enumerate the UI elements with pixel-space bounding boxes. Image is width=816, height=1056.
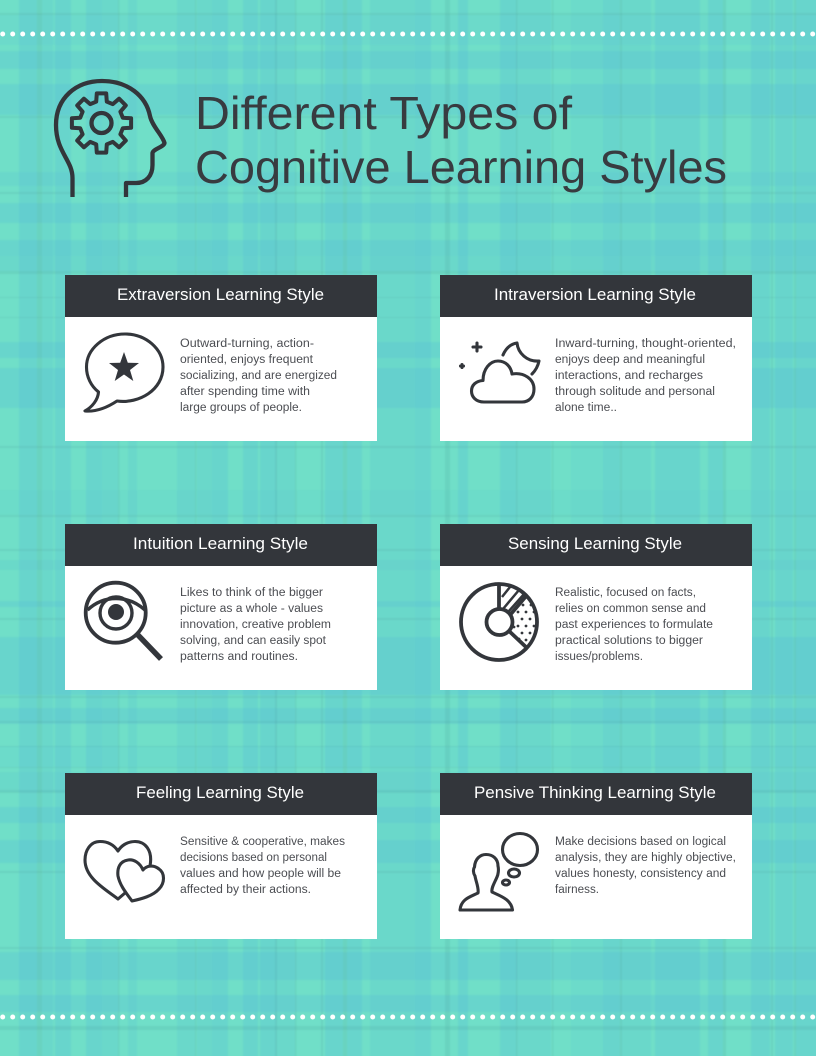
text: intuition description: innovation, creative problem bbox=[180, 619, 331, 631]
text: intraversion description: Inward-turning, thought-oriented, bbox=[555, 338, 736, 350]
text: sensing description bbox=[555, 587, 713, 663]
icon: magnifier over eye bbox=[86, 583, 161, 659]
text: feeling description: Sensitive & cooperative, makes bbox=[180, 836, 345, 848]
text: sensing description: Realistic, focused on facts, bbox=[555, 587, 696, 599]
panel: extraversion bbox=[65, 275, 377, 441]
text: extraversion description: oriented, enjoys frequent bbox=[180, 354, 314, 366]
panel: sensing bbox=[440, 524, 752, 690]
text: sensing description: past experiences to formulate bbox=[555, 619, 713, 631]
text: sensing description: practical solutions to bigger bbox=[555, 635, 703, 647]
text: sensing description: relies on common sense and bbox=[555, 603, 706, 615]
text: feeling description: decisions based on personal bbox=[180, 852, 327, 864]
text: pensive thinking description: fairness. bbox=[555, 884, 599, 896]
panel: feeling bbox=[65, 773, 377, 939]
text: extraversion description: after spending time with bbox=[180, 386, 310, 398]
heading: intraversion: Intraversion Learning Style bbox=[494, 286, 696, 304]
text: intraversion description: alone time.. bbox=[555, 402, 617, 414]
text: feeling description bbox=[180, 836, 345, 896]
dotted border: top bbox=[0, 31, 816, 37]
text: intuition description: Likes to think of the bigger bbox=[180, 587, 323, 599]
panel: intraversion bbox=[440, 275, 752, 441]
dotted border: bottom bbox=[0, 1014, 816, 1020]
text: extraversion description: Outward-turning, action- bbox=[180, 338, 314, 350]
text: extraversion description: socializing, and are energized bbox=[180, 370, 337, 382]
text: sensing description: issues/problems. bbox=[555, 651, 643, 663]
heading: pensive thinking: Pensive Thinking Learning Style bbox=[474, 784, 716, 802]
text: extraversion description: large groups of people. bbox=[180, 402, 302, 414]
title: Cognitive Learning Styles bbox=[195, 141, 727, 193]
icon: cloud, moon and stars bbox=[460, 343, 539, 402]
text: intraversion description: through solitude and personal bbox=[555, 386, 715, 398]
icon: speech bubble with star bbox=[85, 334, 163, 411]
panel: pensive thinking bbox=[440, 773, 752, 939]
title bbox=[195, 87, 727, 193]
text: feeling description: values and how people will be bbox=[180, 868, 341, 880]
heading: intuition: Intuition Learning Style bbox=[133, 535, 308, 553]
text: pensive thinking description bbox=[555, 836, 736, 896]
heading: extraversion: Extraversion Learning Style bbox=[117, 286, 324, 304]
text: feeling description: affected by their actions. bbox=[180, 884, 311, 896]
text: intraversion description: enjoys deep and meaningful bbox=[555, 354, 705, 366]
icon: two hearts bbox=[85, 842, 164, 901]
text: pensive thinking description: analysis, they are highly objective, bbox=[555, 852, 736, 864]
heading: sensing: Sensing Learning Style bbox=[508, 535, 682, 553]
text: intraversion description bbox=[555, 338, 736, 414]
text: intuition description: picture as a whole - values bbox=[180, 603, 323, 615]
icon: person with thought bubbles bbox=[460, 834, 538, 910]
panel: intuition bbox=[65, 524, 377, 690]
text: extraversion description bbox=[180, 338, 337, 414]
heading: feeling: Feeling Learning Style bbox=[136, 784, 304, 802]
icon: head with gear bbox=[56, 81, 164, 197]
text: intuition description: patterns and routines. bbox=[180, 651, 298, 663]
title: Different Types of bbox=[195, 87, 572, 139]
text: pensive thinking description: Make decisions based on logical bbox=[555, 836, 726, 848]
icon: donut chart bbox=[461, 584, 537, 660]
text: pensive thinking description: values honesty, consistency and bbox=[555, 868, 726, 880]
text: intraversion description: interactions, and recharges bbox=[555, 370, 703, 382]
text: intuition description bbox=[180, 587, 331, 663]
text: intuition description: solving, and can easily spot bbox=[180, 635, 327, 647]
